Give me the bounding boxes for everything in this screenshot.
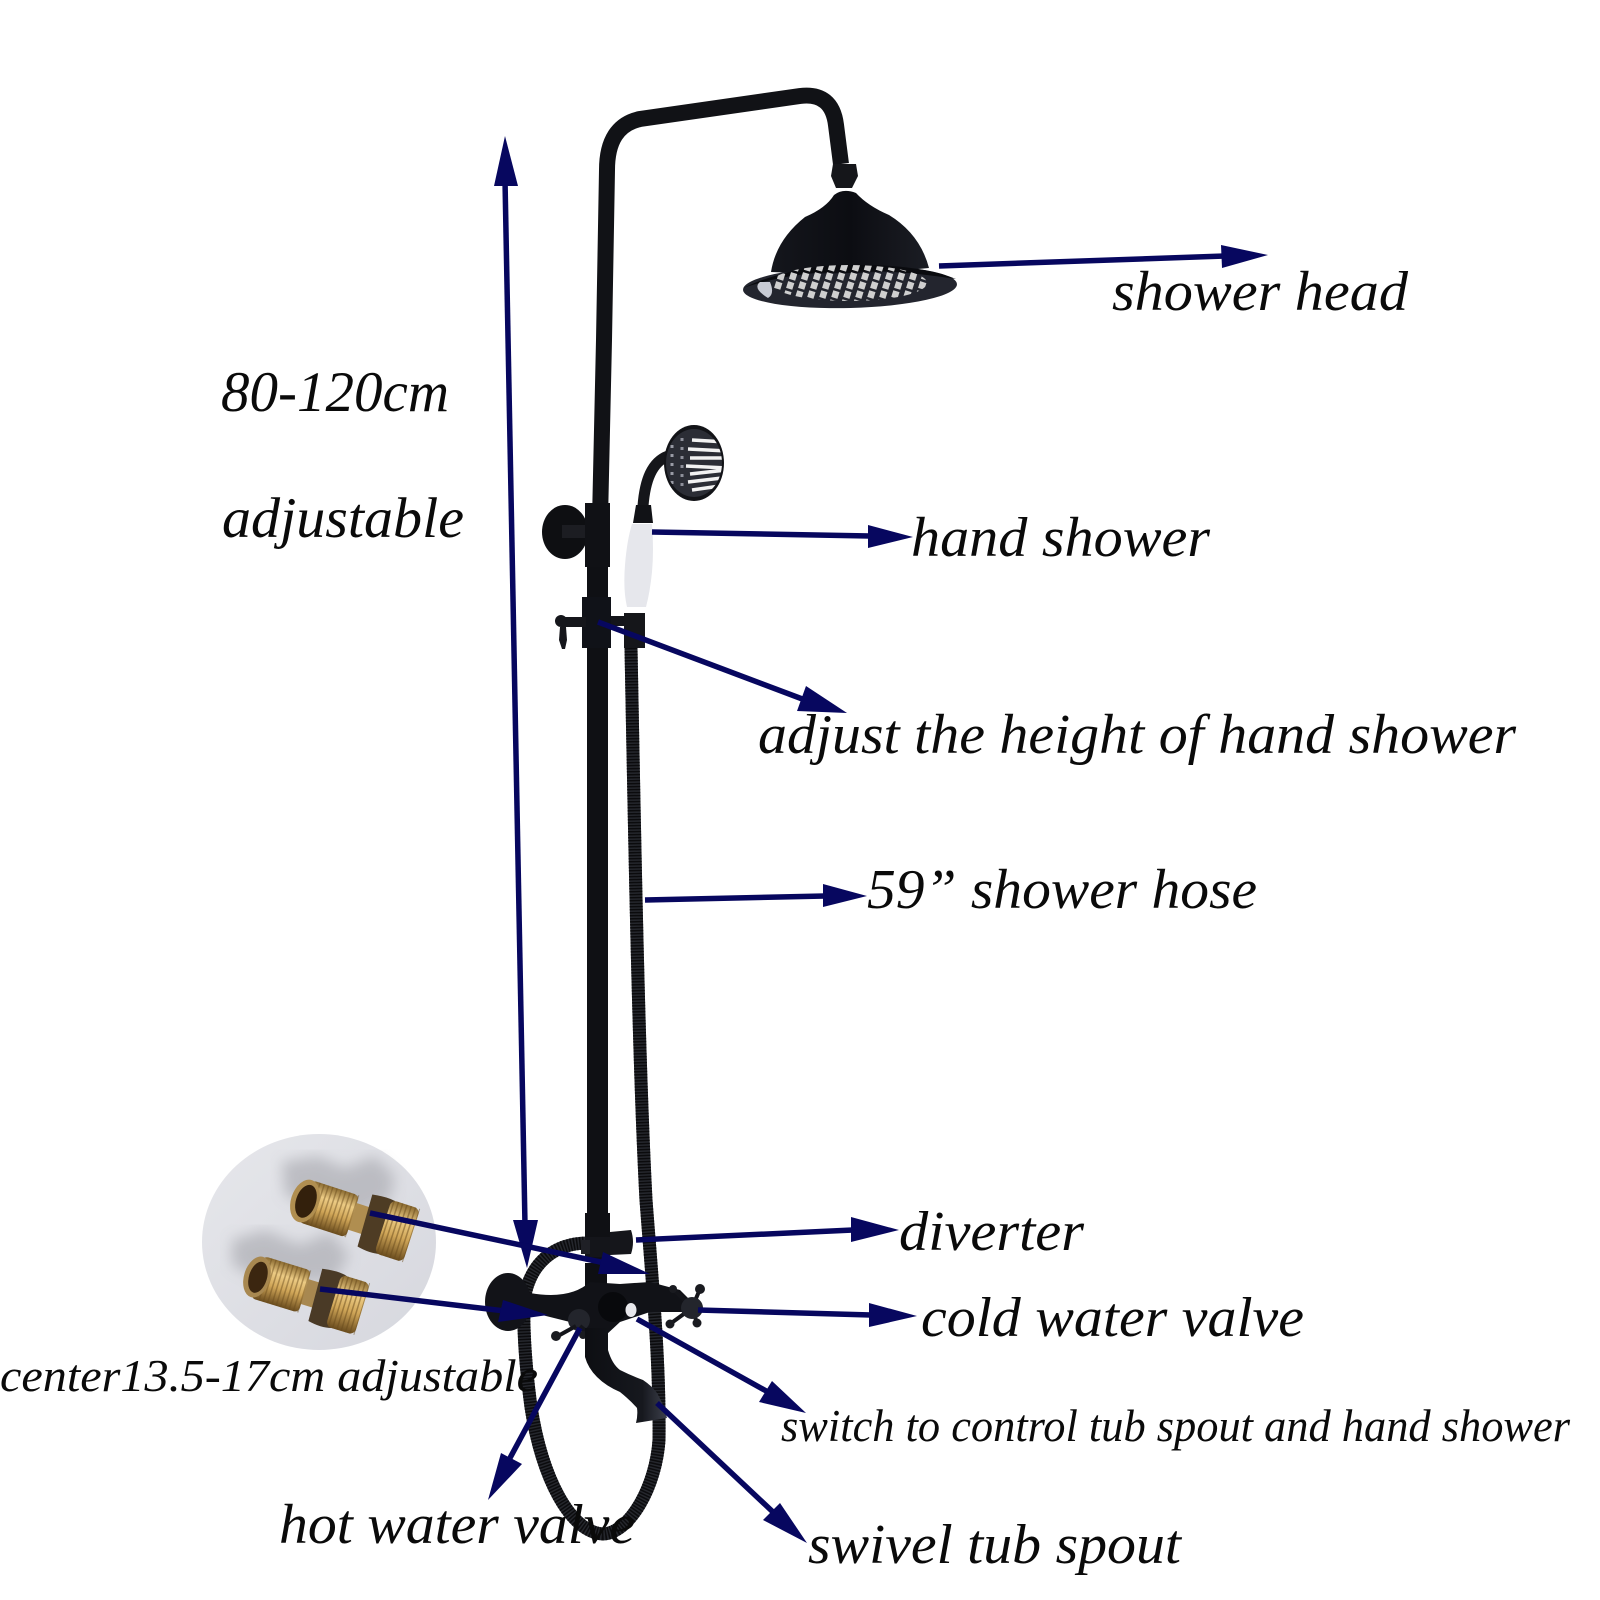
diverter and mixer valve body (485, 1213, 705, 1341)
label: 80-120cm: 80-120cm (221, 361, 449, 424)
arrow: diverter (636, 1217, 899, 1242)
cold water valve handle (666, 1284, 705, 1328)
arrow: shower hose (645, 884, 867, 907)
label: swivel tub spout: swivel tub spout (808, 1514, 1182, 1576)
hand shower (624, 425, 726, 607)
switch knob (598, 1292, 636, 1322)
shower head (742, 164, 958, 311)
arrow: lower fitting to valve (320, 1289, 548, 1322)
hand shower nozzles (672, 438, 726, 490)
label: diverter: diverter (899, 1201, 1084, 1263)
shower column with overhead arm (587, 96, 841, 1260)
label: shower head: shower head (1112, 261, 1409, 323)
hose holder (611, 613, 645, 648)
swivel tub spout (585, 1328, 667, 1423)
shower hose (524, 648, 659, 1534)
label: hand shower: hand shower (911, 507, 1210, 569)
shower head nozzles (773, 264, 929, 302)
label: 59 inch shower hose: 59” shower hose (867, 859, 1257, 921)
wall mount and upper sleeve (542, 503, 610, 567)
lower brass fitting (236, 1246, 371, 1336)
arrow: swivel tub spout (657, 1403, 807, 1543)
annotation arrows (320, 136, 1268, 1543)
label: hot water valve: hot water valve (279, 1494, 635, 1556)
label: adjustable: adjustable (222, 487, 464, 550)
arrow: adjust height (598, 622, 847, 713)
arrow: cold water valve (698, 1303, 917, 1327)
arrow: hand shower (652, 525, 913, 548)
label: switch: switch to control tub spout and hand shower (781, 1401, 1570, 1451)
label: cold water valve: cold water valve (921, 1287, 1304, 1349)
label: adjust the height of hand shower: adjust the height of hand shower (758, 704, 1516, 766)
arrow: height dimension (494, 136, 538, 1268)
label: center adjustable: center13.5-17cm adjustable (0, 1350, 538, 1401)
fittings inset (202, 1134, 436, 1350)
arrow: switch (637, 1319, 806, 1413)
hot water valve handle (551, 1309, 592, 1341)
arrow: upper fitting to valve (370, 1213, 650, 1274)
arrow: shower head (939, 245, 1268, 268)
height slider with knob (555, 597, 611, 649)
upper brass fitting (283, 1170, 420, 1263)
arrow: hot water valve (488, 1328, 580, 1500)
